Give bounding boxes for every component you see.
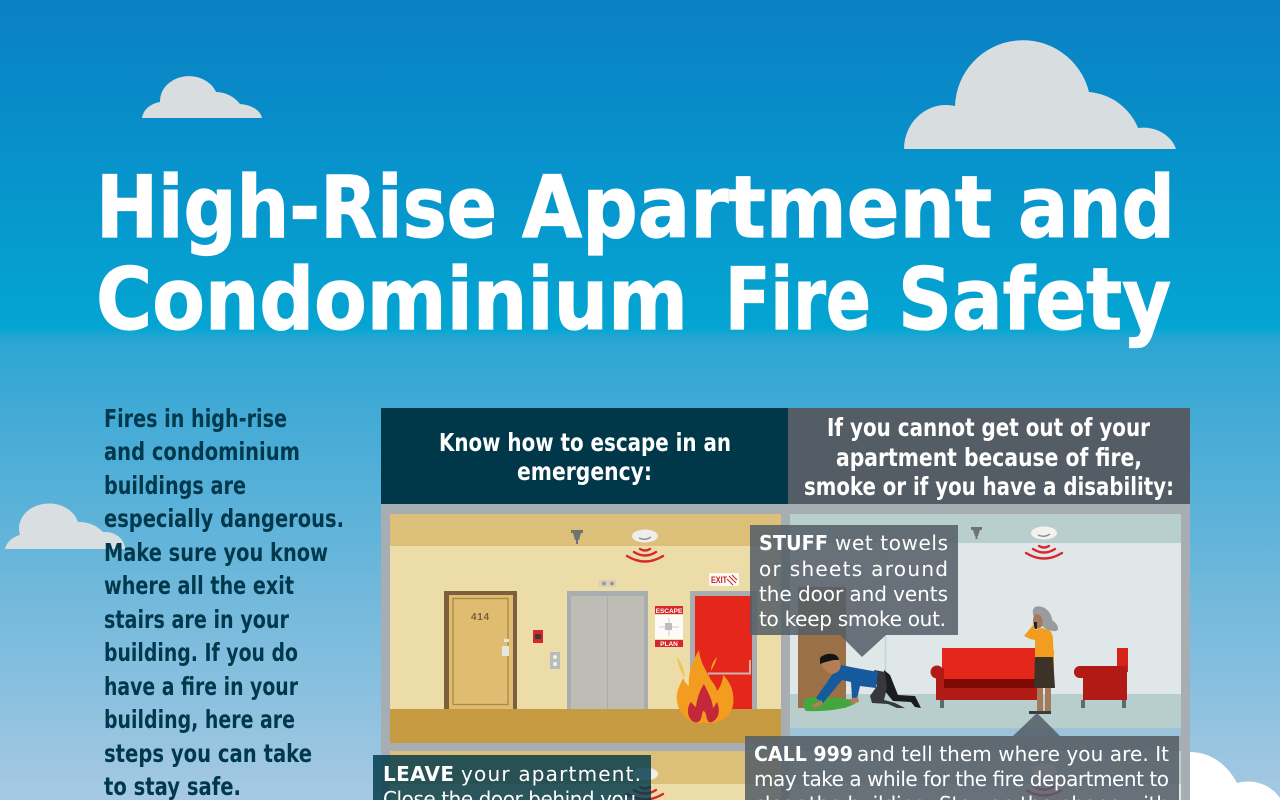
intro text: and condominium	[104, 437, 300, 466]
callout: stuff wet towels: to keep smoke out.	[759, 607, 946, 631]
title: High-Rise	[96, 158, 497, 258]
intro text: Fires in high-rise	[104, 404, 287, 433]
panel: floor below apartment	[790, 751, 1181, 800]
heading: know how to escape	[381, 408, 788, 504]
heading: if you cannot get out	[788, 408, 1190, 504]
person crawling	[812, 654, 921, 708]
hallway wall	[390, 546, 781, 709]
exit sign: EXIT	[711, 575, 727, 585]
callout: call 999	[745, 713, 1179, 800]
cloud: bottom right	[1190, 752, 1280, 800]
heading: if you cannot get out: smoke or if you have a disability:	[804, 472, 1174, 501]
cloud: top left	[142, 76, 262, 118]
title	[96, 158, 1175, 350]
title: and	[1018, 158, 1175, 258]
callout: stuff wet towels: STUFF	[759, 531, 828, 555]
exit door	[690, 591, 757, 709]
heading: if you cannot get out: apartment because of fire,	[836, 443, 1142, 472]
building frame	[381, 504, 1190, 800]
intro text: building, here are	[104, 705, 295, 734]
exit sign	[709, 573, 739, 586]
icon: smoke detector with alarm waves	[627, 530, 663, 562]
callout: leave your apartment: LEAVE	[383, 762, 454, 786]
panel: apartment room	[790, 514, 1181, 736]
callout: call 999: CALL 999	[754, 742, 853, 766]
intro text: where all the exit	[104, 571, 294, 600]
room ceiling	[790, 514, 1181, 543]
woman on phone	[1024, 606, 1058, 714]
callout: call 999: and tell them where you are. It	[857, 742, 1169, 766]
room floor	[790, 694, 1181, 728]
callout: call 999: may take a while for the fire department to	[754, 767, 1169, 791]
room wall	[790, 543, 1181, 694]
intro text: Make sure you know	[104, 538, 328, 567]
cloud: top right	[904, 40, 1176, 149]
title: Fire	[725, 250, 871, 350]
intro text: stairs are in your	[104, 605, 290, 634]
cloud: left middle	[5, 503, 125, 549]
callout: stuff wet towels: the door and vents	[759, 582, 948, 606]
hallway ceiling	[390, 514, 781, 546]
heading: know how to escape: emergency:	[517, 457, 652, 486]
wet towel	[803, 697, 858, 711]
callout: stuff wet towels: wet towels	[835, 531, 948, 555]
intro text: buildings are	[104, 471, 246, 500]
icon: smoke detector with alarm waves	[1026, 526, 1062, 558]
escape plan poster: PLAN	[660, 641, 678, 648]
panel: floor below hallway	[390, 751, 781, 800]
escape plan poster: ESCAPE	[656, 608, 683, 615]
red sofa	[930, 648, 1038, 708]
apartment door inside	[798, 587, 846, 708]
hallway floor	[390, 709, 781, 743]
intro text	[104, 404, 344, 800]
elevator indicator	[599, 580, 616, 587]
title: Apartment	[522, 158, 992, 258]
callout: stuff wet towels	[750, 525, 958, 657]
callout: leave your apartment	[373, 755, 651, 800]
heading: if you cannot get out: If you cannot get out of your	[827, 413, 1151, 442]
icon: sprinkler	[571, 530, 583, 544]
elevator	[567, 591, 648, 709]
intro text: building. If you do	[104, 638, 298, 667]
callout: leave your apartment: your apartment.	[461, 762, 641, 786]
heading: know how to escape: Know how to escape in an	[439, 428, 731, 457]
apartment door 414: 414	[471, 612, 489, 623]
title: Condominium	[96, 250, 688, 350]
elevator call buttons	[550, 652, 560, 669]
icon: sprinkler	[971, 527, 982, 539]
callout: stuff wet towels: or sheets around	[759, 557, 948, 581]
intro text: steps you can take	[104, 739, 312, 768]
intro text: have a fire in your	[104, 672, 299, 701]
red armchair	[1074, 648, 1128, 708]
title: Safety	[898, 250, 1171, 350]
escape plan poster	[655, 606, 683, 648]
intro text: especially dangerous.	[104, 504, 344, 533]
apartment door 414	[444, 591, 517, 709]
icon: fire	[677, 650, 734, 723]
fire alarm pull box	[533, 630, 543, 643]
panel: hallway	[390, 514, 781, 743]
